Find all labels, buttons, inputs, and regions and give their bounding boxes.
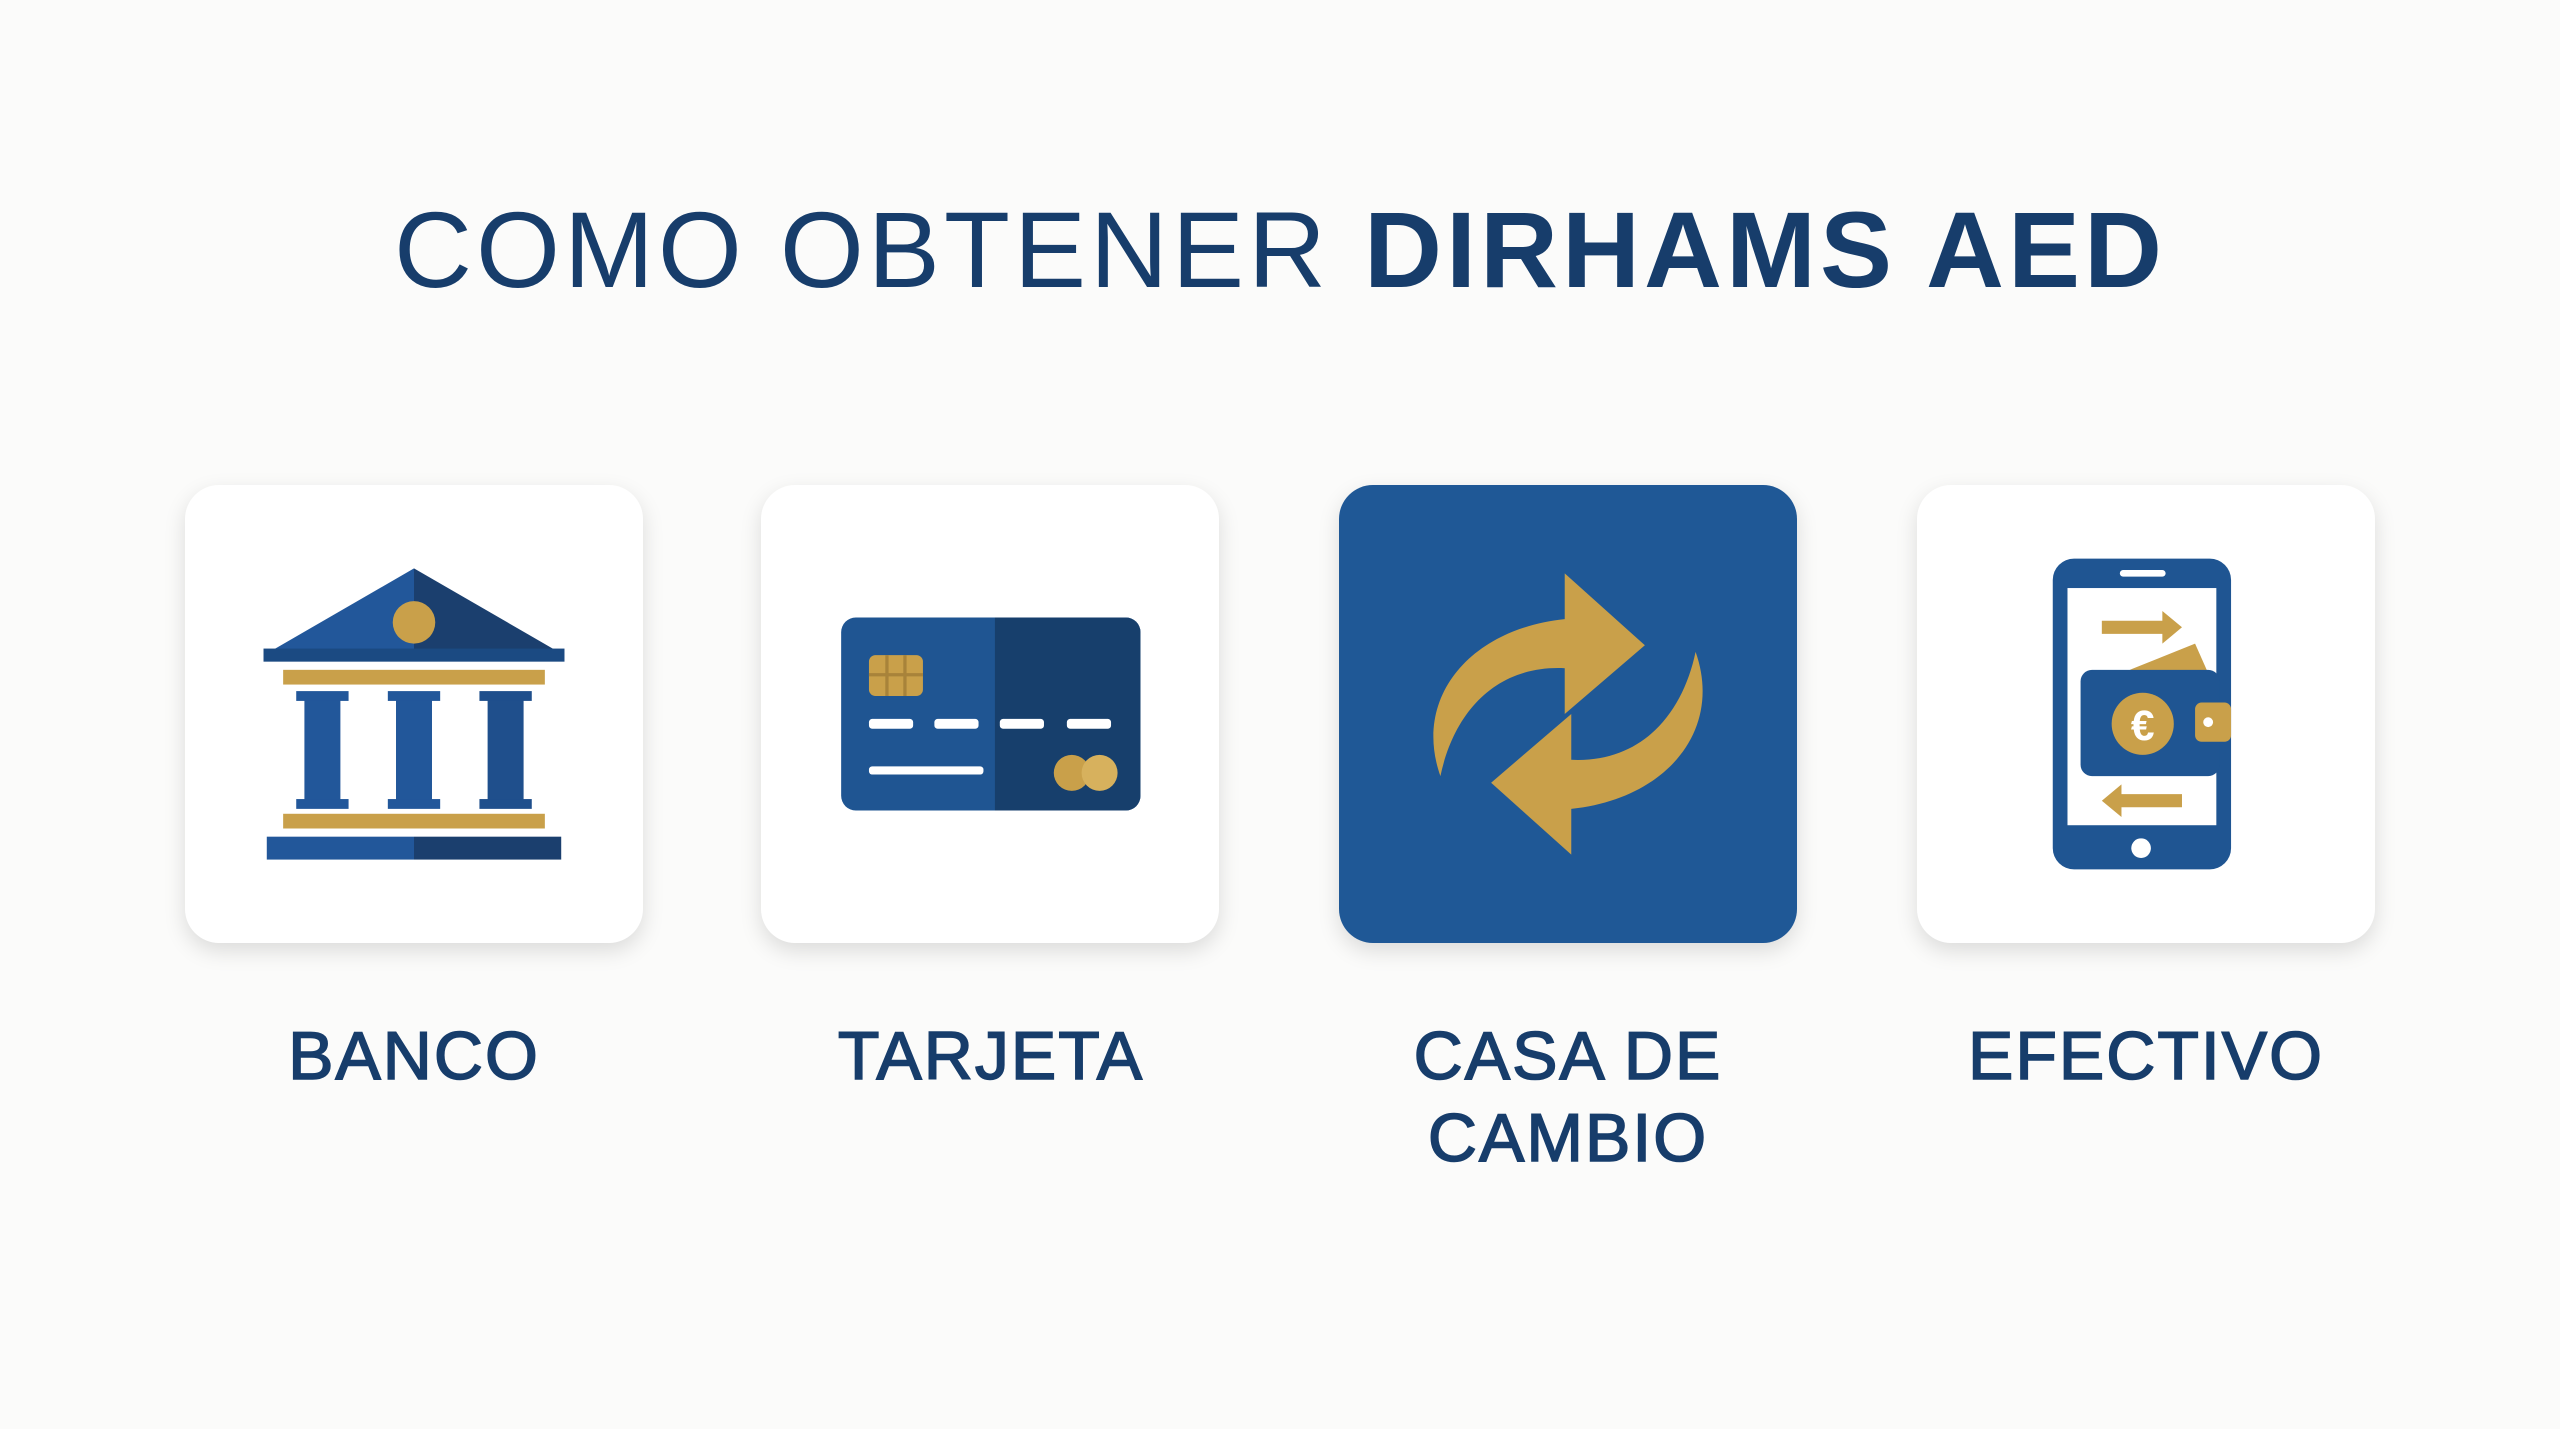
panel: casa de cambio: [1339, 485, 1797, 943]
panel: efectivo: [1917, 485, 2375, 943]
title: COMO OBTENER DIRHAMS AED: [394, 189, 2166, 310]
label: banco: BANCO: [288, 1018, 540, 1094]
label: casa de cambio: CAMBIO: [1428, 1100, 1708, 1176]
icon: credit card: [841, 618, 1140, 810]
label: efectivo: EFECTIVO: [1968, 1018, 2324, 1094]
panel: banco: [185, 485, 643, 943]
icon: bank: [264, 568, 564, 860]
label: casa de cambio: [1414, 1018, 1722, 1176]
panel: tarjeta: [761, 485, 1219, 943]
icon: phone wallet: €: [2131, 703, 2155, 750]
label: tarjeta: TARJETA: [838, 1018, 1144, 1094]
icon: phone wallet: [2052, 558, 2232, 870]
label: casa de cambio: CASA DE: [1414, 1018, 1722, 1094]
icon: exchange arrows: [1433, 574, 1703, 854]
